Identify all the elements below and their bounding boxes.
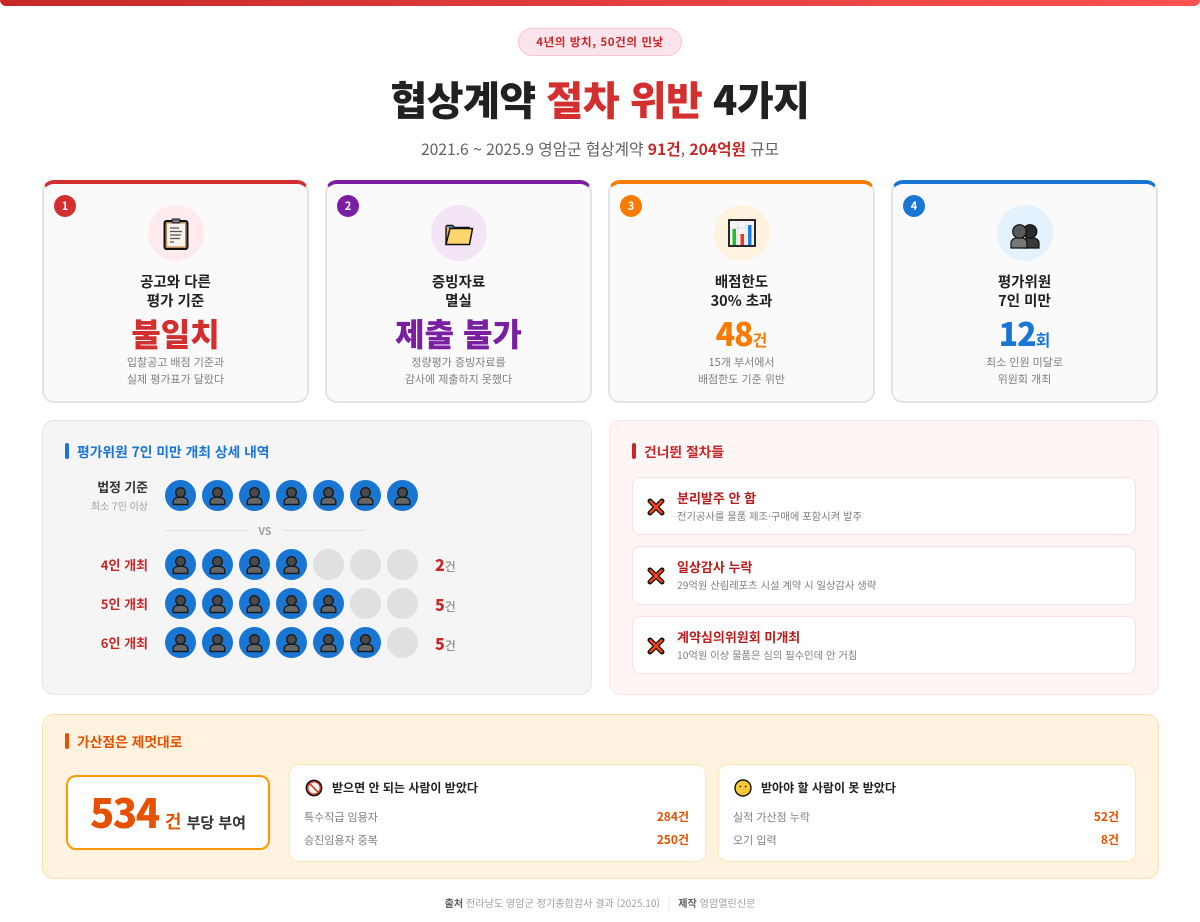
- icon: two people: [997, 205, 1053, 261]
- number badge 3: 3: [628, 198, 634, 214]
- panel: bonus points: [42, 714, 1159, 879]
- skipped item 1: [632, 477, 1136, 535]
- card description: 입찰공고 배점 기준과: [127, 354, 224, 370]
- heading marker: [65, 733, 69, 749]
- card heading: 평가 기준: [147, 290, 204, 311]
- card heading: 30% 초과: [711, 290, 772, 311]
- panel: skipped procedures: [609, 420, 1159, 695]
- pictogram: 5 members: [165, 588, 418, 619]
- badge: [518, 28, 682, 56]
- panel: card 3: [608, 180, 875, 403]
- skipped item 1: 전기공사를 물품 제조·구매에 포함시켜 발주: [677, 508, 862, 523]
- number badge 2: 2: [345, 198, 351, 214]
- card description: [986, 354, 1063, 386]
- card description: 최소 인원 미달로: [986, 354, 1063, 370]
- icon: bar chart: [714, 205, 770, 261]
- callout: 534 cases: [66, 775, 270, 850]
- footer source: 출처 전라남도 영암군 정기종합감사 결과 (2025.10) | 제작 영암열린신문: [445, 895, 755, 910]
- label: 4 members: 4인 개최: [101, 555, 148, 574]
- heading: committee detail: 평가위원 7인 미만 개최 상세 내역: [77, 441, 269, 461]
- icon: blank face: [734, 779, 752, 797]
- card heading: [711, 271, 772, 311]
- card description: [127, 354, 224, 386]
- skipped item 3: 10억원 이상 물품은 심의 필수인데 안 거침: [677, 647, 857, 662]
- subtitle: 2021.6 ~ 2025.9 영암군 협상계약 91건, 204억원 규모: [421, 137, 779, 160]
- subheading: 받으면 안 되는 사람이 받았다: [332, 779, 478, 796]
- number badge 2: [337, 195, 359, 217]
- key value: 12회: [999, 310, 1050, 356]
- row: wrong input: 8건: [1101, 831, 1119, 848]
- key value: 불일치: [131, 310, 220, 356]
- row: missing merit points: [733, 808, 1119, 825]
- card heading: [140, 271, 211, 311]
- count: 5 members: 5건: [435, 592, 456, 616]
- pictogram: 6 members: [165, 627, 418, 658]
- number badge 1: 1: [62, 198, 68, 214]
- number badge 4: [903, 195, 925, 217]
- label: 6 members: 6인 개최: [101, 633, 148, 652]
- card heading: 멸실: [445, 290, 472, 311]
- skipped item 2: [632, 546, 1136, 605]
- skipped item 2: 29억원 산림레포츠 시설 계약 시 일상감사 생략: [677, 577, 876, 592]
- label: legal standard: 법정 기준: [97, 477, 148, 496]
- card description: 정량평가 증빙자료를: [411, 354, 506, 370]
- card description: 실제 평가표가 달랐다: [127, 370, 224, 386]
- vs label: VS: [259, 524, 271, 539]
- badge: 4년의 방치, 50건의 민낯: [536, 34, 664, 50]
- row: wrong input: 오기 입력: [733, 832, 777, 848]
- icon: clipboard: [148, 205, 204, 261]
- panel: should have received: [718, 764, 1136, 862]
- panel: committee detail: [42, 420, 592, 695]
- panel: should not have received: [289, 764, 706, 862]
- card description: 15개 부서에서: [709, 354, 774, 370]
- count: 6 members: 5건: [435, 631, 456, 655]
- card description: 위원회 개최: [998, 370, 1051, 386]
- top accent bar: [0, 0, 1200, 6]
- icon: prohibited: [306, 780, 322, 796]
- label: minimum seven: 최소 7인 이상: [91, 498, 148, 513]
- card heading: 7인 미만: [998, 290, 1051, 311]
- card description: [698, 354, 785, 386]
- card heading: 평가위원: [998, 271, 1051, 292]
- key value: 48건: [716, 310, 767, 356]
- heading: skipped procedures: 건너뛴 절차들: [644, 441, 724, 461]
- heading: bonus points: 가산점은 제멋대로: [77, 731, 182, 751]
- row: duplicate promotion: 250건: [657, 831, 689, 848]
- row: wrong input: [733, 831, 1119, 848]
- label: 5 members: 5인 개최: [101, 594, 148, 613]
- panel: card 4: [891, 180, 1158, 403]
- card heading: 증빙자료: [432, 271, 485, 292]
- panel: card 2: [325, 180, 592, 403]
- row: special promotion: [304, 808, 689, 825]
- card heading: 공고와 다른: [140, 271, 211, 292]
- heading marker: [632, 443, 636, 459]
- skipped item 1: 분리발주 안 함: [677, 488, 756, 507]
- key value: 제출 불가: [395, 310, 522, 356]
- skipped item 3: [632, 616, 1136, 674]
- number badge 1: [54, 195, 76, 217]
- row: missing merit points: 실적 가산점 누락: [733, 809, 810, 825]
- subheading: 받아야 할 사람이 못 받았다: [761, 779, 896, 796]
- icon: folder: [431, 205, 487, 261]
- row: duplicate promotion: [304, 831, 689, 848]
- pictogram: legal standard: [165, 480, 418, 511]
- callout text: 534 건 부당 부여: [90, 782, 246, 840]
- number badge 3: [620, 195, 642, 217]
- count: 4 members: 2건: [435, 552, 456, 576]
- row: missing merit points: 52건: [1094, 808, 1119, 825]
- panel: card 1: [42, 180, 309, 403]
- row: special promotion: 284건: [657, 808, 689, 825]
- card heading: [432, 271, 485, 311]
- pictogram: 4 members: [165, 549, 418, 580]
- heading marker: [65, 443, 69, 459]
- card heading: [998, 271, 1051, 311]
- skipped item 2: 일상감사 누락: [677, 557, 752, 576]
- number badge 4: 4: [911, 198, 917, 214]
- card heading: 배점한도: [715, 271, 768, 292]
- card description: 배점한도 기준 위반: [698, 370, 785, 386]
- title: 협상계약 절차 위반 4가지: [390, 69, 809, 127]
- skipped item 3: 계약심의위원회 미개최: [677, 627, 800, 646]
- card description: [405, 354, 512, 386]
- row: duplicate promotion: 승진임용자 중복: [304, 832, 378, 848]
- card description: 감사에 제출하지 못했다: [405, 370, 512, 386]
- row: special promotion: 특수직급 임용자: [304, 809, 378, 825]
